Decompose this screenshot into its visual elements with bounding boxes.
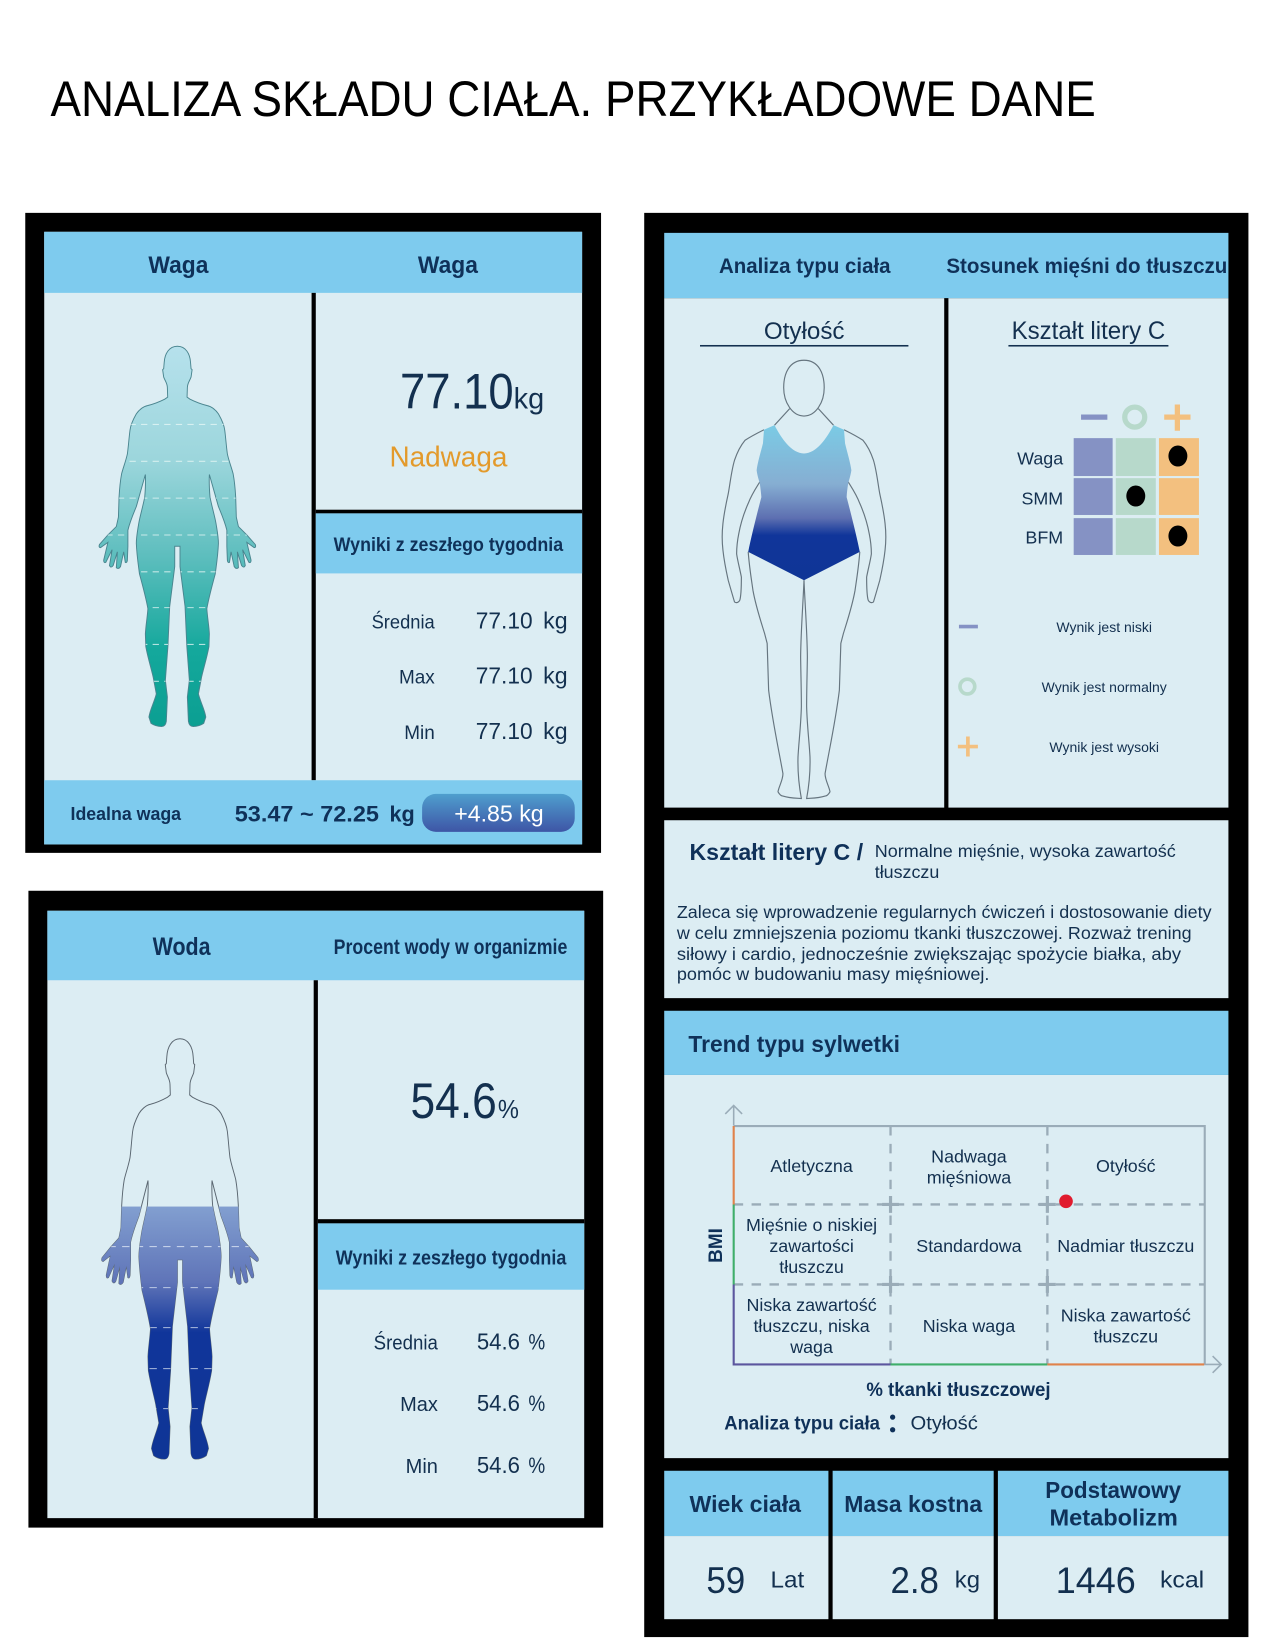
heading: body type: Analiza typu ciała [719, 255, 891, 278]
icon: body silhouette water level [101, 1038, 259, 1460]
stat: basal metabolism: kcal [1160, 1567, 1204, 1593]
matrix: weight, SMM, BFM: SMM [1021, 488, 1063, 508]
weight status: Nadwaga [389, 442, 508, 474]
ideal weight row: 53.47 ~ 72.25 [235, 801, 379, 826]
stats: weight [372, 608, 568, 744]
stats: weight: kg [543, 608, 568, 634]
stat: body age: Wiek ciała [689, 1491, 802, 1517]
panel: explanation [664, 820, 1228, 998]
stats: weight: 77.10 [476, 608, 533, 634]
stats: weight: Min [404, 723, 435, 744]
panel: water [28, 891, 603, 1528]
water value: 54.6 [411, 1072, 497, 1129]
ideal weight row: +4.85 kg [454, 800, 544, 826]
explanation body: Zaleca się wprowadzenie regularnych ćwiczeń i dostosowanie diety [677, 902, 1212, 922]
chart: BMI vs body fat grid: Nadmiar tłuszczu [1057, 1236, 1194, 1256]
explanation heading: Kształt litery C / [689, 839, 864, 865]
stat: bone mass: kg [955, 1567, 980, 1593]
result: body type analysis [724, 1414, 978, 1435]
chart: BMI vs body fat grid: Mięśnie o niskiej [746, 1215, 877, 1235]
explanation body: w celu zmniejszenia poziomu tkanki tłuszczowej. Rozważ trening [676, 923, 1192, 943]
stat: bone mass: Masa kostna [844, 1491, 983, 1517]
title: ANALIZA SKŁADU CIAŁA. PRZYKŁADOWE DANE [51, 70, 1096, 127]
explanation subtitle: Normalne mięśnie, wysoka zawartość [875, 841, 1176, 861]
heading: water: Woda [153, 933, 211, 961]
legend: Wynik jest normalny [1042, 679, 1167, 695]
stats: water: % [528, 1391, 545, 1416]
chart: BMI vs body fat grid: waga [789, 1337, 833, 1357]
panel: body analysis frame [644, 213, 1248, 1637]
chart: BMI vs body fat grid: Niska zawartość [747, 1295, 877, 1315]
heading: weight right: Waga [418, 252, 478, 279]
explanation body: siłowy i cardio, jednocześnie zwiększając spożycie białka, aby [677, 944, 1181, 964]
chart: BMI vs body fat grid: Niska waga [923, 1316, 1015, 1336]
stat: body age: 59 [706, 1560, 745, 1601]
chart: BMI vs body fat grid: Nadwaga [931, 1146, 1007, 1166]
panel: body type and ratio [664, 233, 1228, 808]
stats: weight: Średnia [372, 612, 435, 634]
stats: water [374, 1329, 545, 1478]
heading: water percent: Procent wody w organizmie [334, 936, 567, 959]
weight value: 77.10 [400, 363, 514, 420]
chart: BMI vs body fat grid: tłuszczu, niska [753, 1316, 870, 1336]
chart: BMI vs body fat grid: Niska zawartość [1061, 1305, 1191, 1325]
water value: % [498, 1094, 519, 1124]
chart: BMI vs body fat grid: Atletyczna [770, 1156, 853, 1176]
stats: water: % [528, 1330, 545, 1355]
chart: BMI vs body fat grid: zawartości [769, 1236, 854, 1256]
shape label: Kształt litery C [1012, 317, 1165, 345]
stats: weight: 77.10 [476, 662, 533, 688]
matrix: weight, SMM, BFM: Waga [1017, 448, 1063, 468]
axis label: body fat percent: % tkanki tłuszczowej [866, 1380, 1051, 1401]
chart: BMI vs body fat grid: tłuszczu [1094, 1326, 1158, 1346]
legend [958, 619, 1167, 757]
stat: body age [664, 1471, 828, 1619]
heading: trend: Trend typu sylwetki [688, 1031, 900, 1057]
explanation body: pomóc w budowaniu masy mięśniowej. [677, 964, 989, 984]
matrix: weight, SMM, BFM: BFM [1025, 527, 1063, 547]
icon: female body with swimsuit [722, 360, 886, 799]
panel: weight [25, 213, 601, 853]
result: body type analysis: Otyłość [911, 1414, 978, 1435]
matrix: weight, SMM, BFM [1017, 404, 1199, 555]
stats: weight: kg [543, 718, 568, 744]
ideal weight row: kg [389, 801, 415, 826]
legend: Wynik jest niski [1056, 619, 1152, 635]
chart: BMI vs body fat grid: tłuszczu [779, 1257, 844, 1277]
heading: muscle to fat ratio: Stosunek mięśni do tłuszczu [946, 255, 1227, 278]
stat: basal metabolism: 1446 [1056, 1560, 1136, 1601]
ideal weight row: Idealna waga [71, 803, 182, 824]
subheading: last week: Wyniki z zeszłego tygodnia [334, 535, 564, 556]
stats: water: 54.6 [477, 1390, 520, 1416]
icon: body silhouette teal [95, 346, 263, 727]
heading: weight left: Waga [148, 252, 209, 279]
explanation body [676, 902, 1212, 984]
stats: water: Max [400, 1394, 438, 1416]
stat: basal metabolism [998, 1471, 1228, 1619]
chart: BMI vs body fat grid: mięśniowa [927, 1167, 1011, 1187]
stat: bone mass: 2.8 [891, 1560, 939, 1601]
stats: water: Średnia [374, 1331, 439, 1355]
stat: basal metabolism: Metabolizm [1049, 1505, 1178, 1531]
stat: basal metabolism: Podstawowy [1045, 1477, 1181, 1503]
axis label: BMI: BMI [706, 1228, 727, 1263]
stats: water: % [528, 1453, 545, 1478]
body type label: Otyłość [764, 318, 845, 345]
stats: weight: Max [399, 667, 435, 688]
stats: water: 54.6 [477, 1329, 520, 1355]
subheading: last week: Wyniki z zeszłego tygodnia [336, 1247, 567, 1269]
chart: BMI vs body fat grid: Standardowa [916, 1236, 1022, 1256]
ideal weight row [71, 794, 575, 832]
stats: water: 54.6 [477, 1452, 520, 1478]
result: body type analysis: Analiza typu ciała [724, 1414, 880, 1435]
explanation subtitle [875, 841, 1176, 882]
chart: BMI vs body fat grid: Otyłość [1096, 1156, 1156, 1176]
stat: bone mass [833, 1471, 994, 1619]
explanation subtitle: tłuszczu [875, 862, 939, 882]
stats: water: Min [406, 1456, 438, 1478]
stats: weight: 77.10 [476, 718, 533, 744]
stat: body age: Lat [771, 1567, 805, 1593]
chart: BMI vs body fat grid [725, 1106, 1221, 1373]
stats: weight: kg [543, 662, 568, 688]
panel: silhouette trend [664, 1011, 1228, 1458]
legend: Wynik jest wysoki [1049, 739, 1159, 755]
weight value: kg [514, 383, 544, 416]
